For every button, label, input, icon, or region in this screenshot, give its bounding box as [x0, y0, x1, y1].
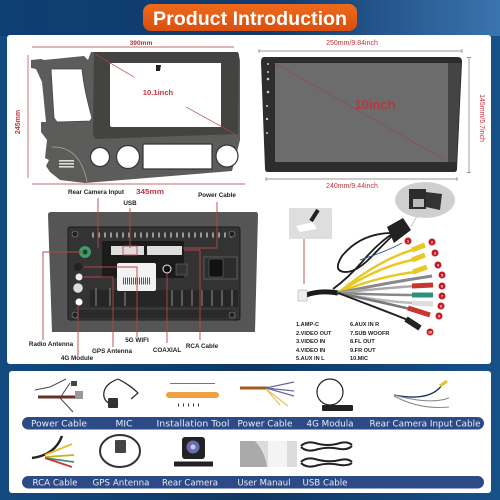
legend: 4.VIDEO IN: [296, 348, 325, 354]
RCA harness: 8.FL OUT: [350, 339, 375, 345]
legend: 1.AMP-C: [296, 322, 319, 328]
legend: 2.VIDEO OUT: [296, 331, 332, 337]
harness body: [306, 292, 338, 295]
accessories row 1 bar: 4G Modula: [306, 420, 354, 430]
accessories row 1 bar: Rear Camera Input Cable: [370, 420, 481, 430]
icon: installation tool: [166, 383, 219, 405]
black cables: [333, 233, 392, 289]
accessories row 2 bar: User Manaul: [238, 478, 290, 488]
RCA harness: 6.AUX IN R: [350, 322, 379, 328]
icon: USB cables: [301, 442, 352, 467]
icon: power cable: [35, 379, 83, 412]
back of unit: 5G WIFI: [125, 337, 149, 344]
marker numbers: 6: [441, 284, 443, 288]
icon: power cable loom: [240, 382, 294, 406]
back of unit: 4G Module: [61, 355, 94, 362]
RCA harness: 9.FR OUT: [350, 348, 376, 354]
accessories row 2 bar: [22, 476, 484, 488]
icon: rear camera: [174, 437, 213, 464]
title: [143, 4, 357, 31]
dimension: height: 245mm: [15, 110, 22, 134]
vents: [92, 232, 232, 238]
accessories row 2 bar: RCA Cable: [32, 478, 78, 488]
connector inset: [289, 208, 332, 239]
title: Product Introduction: [153, 9, 347, 30]
panel: product details: [7, 35, 491, 364]
accessories row 1 bar: Power Cable: [238, 420, 293, 430]
panel: accessories: [9, 371, 491, 493]
accessories row 1 bar: Power Cable: [31, 420, 87, 430]
screws: [72, 231, 235, 318]
back of unit: RCA Cable: [186, 343, 219, 350]
icon: rear camera input cable: [394, 381, 449, 408]
port labels: Rear Camera Input: [68, 189, 125, 196]
accessories row 1 bar: [22, 417, 484, 430]
marker numbers: 2: [431, 240, 433, 244]
screen label: 10inch: [354, 97, 396, 112]
accessories row 2 bar: GPS Antenna: [92, 478, 150, 488]
stereo screen: [259, 40, 485, 190]
icon: mic: [104, 379, 138, 408]
marker numbers: 7: [441, 294, 443, 298]
chassis: [48, 212, 258, 332]
icon: 4G module: [317, 379, 353, 411]
icon: dash bezel: [31, 52, 240, 183]
marker numbers: 10: [428, 330, 432, 334]
connectors: [111, 246, 144, 255]
RCA harness: 7.SUB WOOFR: [350, 331, 389, 337]
screen size: 10.1inch: [143, 88, 174, 97]
RCA harness: 10.MIC: [350, 356, 368, 362]
marker numbers: 5: [441, 273, 443, 277]
back of unit: Radio Antenna: [29, 341, 74, 348]
dimension: width: 390mm: [130, 40, 152, 47]
size lines: [28, 47, 245, 184]
legend: 3.VIDEO IN: [296, 339, 325, 345]
marker numbers: 1: [407, 239, 409, 243]
icon: RCA cable: [32, 436, 74, 467]
accessories row 2 bar: USB Cable: [302, 478, 348, 488]
dimension lines: [259, 49, 471, 181]
dash frame drawing: [15, 40, 245, 184]
accessories row 1 bar: MIC: [116, 420, 132, 430]
RCA harness: [289, 182, 455, 362]
head unit: [261, 57, 462, 172]
numbered markers: [404, 238, 446, 336]
dimension top: 250mm/9.84inch: [326, 40, 378, 47]
accessories row 2 bar: Rear Camera: [162, 478, 218, 488]
back of unit: Power Cable: [198, 192, 236, 199]
ports: [79, 246, 91, 258]
callout lines: [43, 198, 217, 356]
dimension bottom: 240mm/9.44inch: [326, 183, 378, 190]
display: [275, 63, 448, 162]
icon: GPS antenna: [100, 435, 140, 467]
back of unit: 345mm: [136, 187, 164, 196]
back of unit: COAXIAL: [153, 347, 181, 354]
back of unit: [29, 187, 258, 362]
magnified inset: [395, 182, 455, 218]
sticker: [117, 263, 156, 291]
back of unit: USB: [123, 200, 137, 207]
side buttons: [266, 63, 269, 134]
icon: user manual: [240, 441, 297, 467]
accessories row 1 bar: Installation Tool: [156, 420, 230, 430]
back of unit: GPS Antenna: [92, 348, 132, 355]
legend: 5.AUX IN L: [296, 356, 325, 362]
dimension right: 145mm/5.7inch: [478, 94, 485, 142]
bezel buttons: [90, 144, 238, 169]
marker numbers: 9: [438, 314, 440, 318]
marker numbers: 3: [434, 251, 436, 255]
marker numbers: 8: [440, 304, 442, 308]
marker numbers: 4: [437, 263, 439, 267]
